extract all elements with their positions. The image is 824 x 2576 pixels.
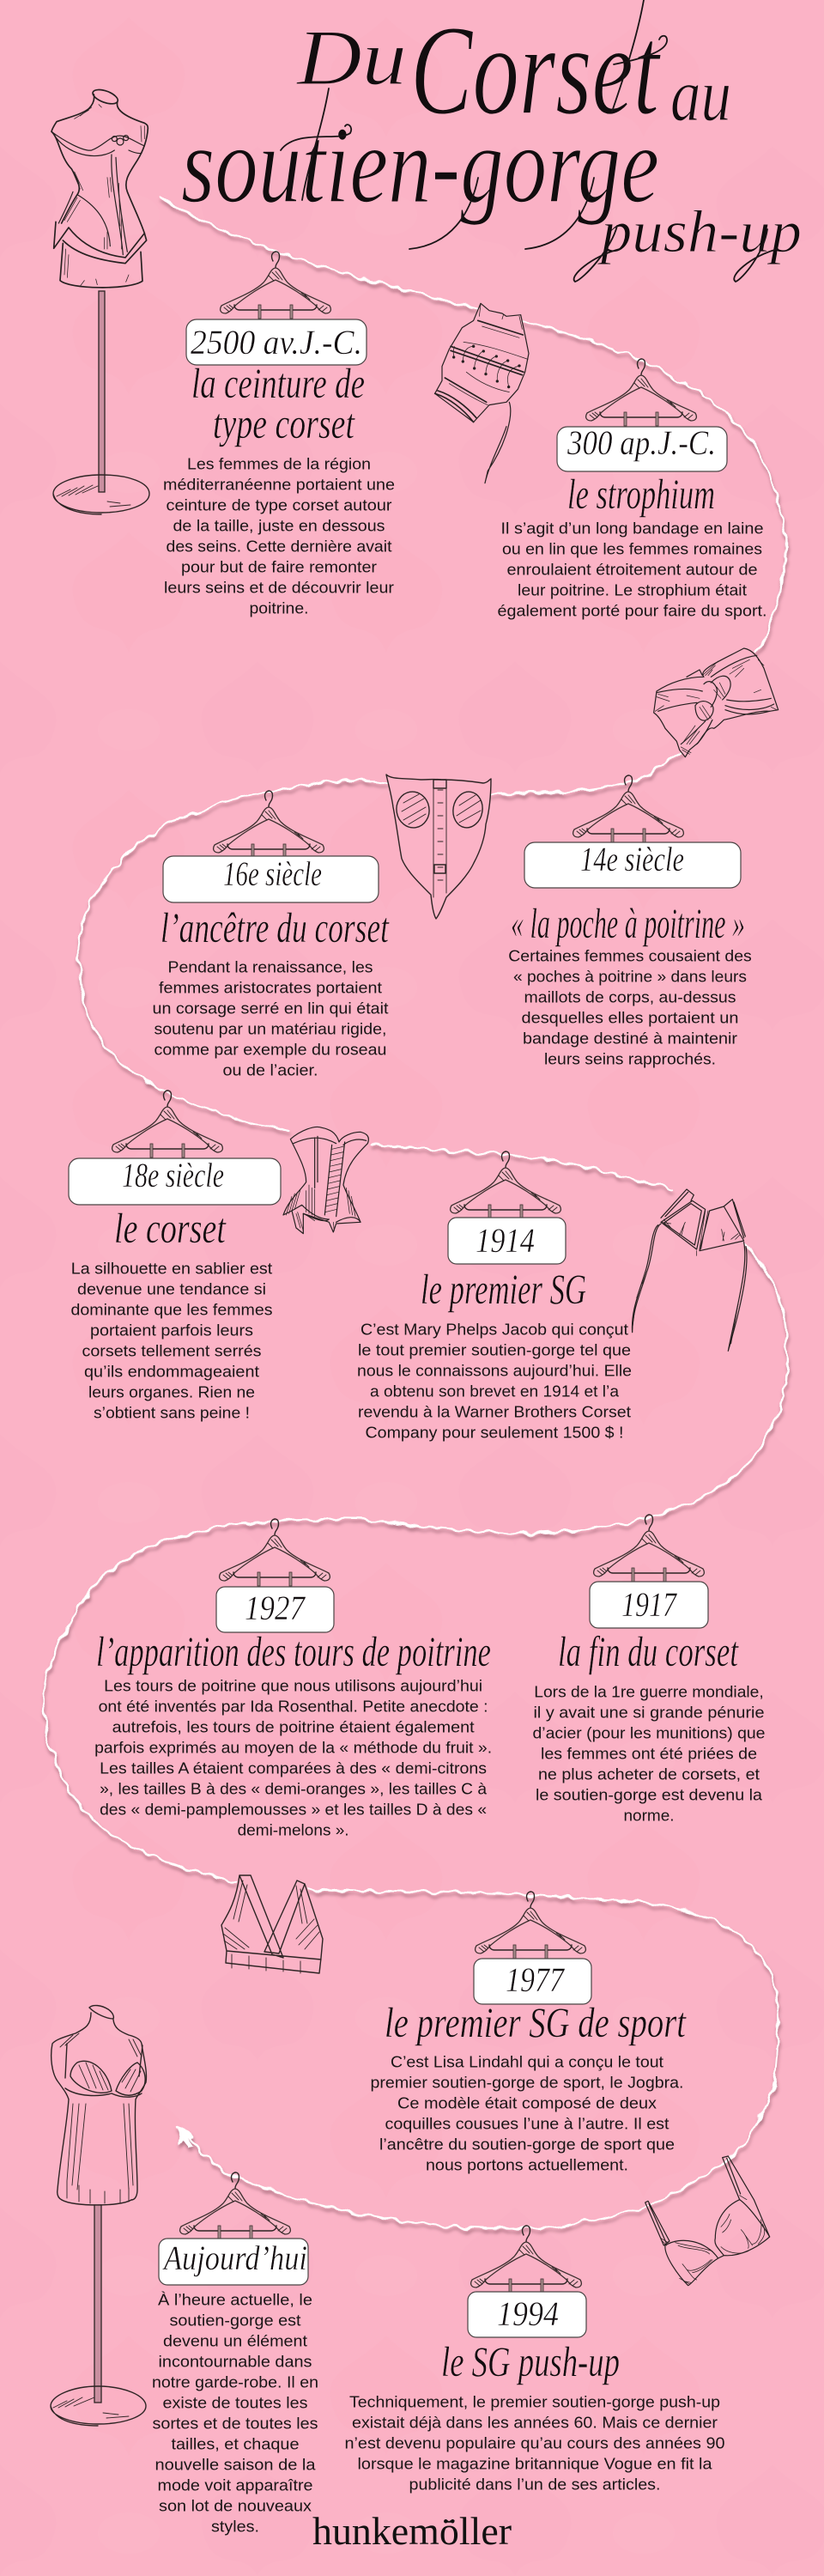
- body text: [508, 946, 752, 1067]
- body text: ont été inventés par Ida Rosenthal. Petite anecdote :: [99, 1697, 488, 1715]
- date plaque: [69, 1156, 281, 1205]
- heading: [191, 359, 365, 447]
- date plaque: 1994: [497, 2294, 559, 2333]
- body text: n’est devenu populaire qu’au cours des années 90: [345, 2433, 724, 2451]
- body text: des « demi-pamplemousses » et les tailles D à des «: [100, 1800, 487, 1818]
- body text: nous le connaissons aujourd’hui. Elle: [357, 1362, 632, 1380]
- date plaque: 300 ap.J.-C.: [566, 423, 716, 462]
- title: Corset: [410, 0, 661, 142]
- body text: leurs seins rapprochés.: [544, 1049, 716, 1067]
- icon: hanger: [573, 775, 683, 842]
- panel: 1917: [532, 1515, 766, 1825]
- icon: first bra 1914: [632, 1189, 747, 1351]
- body text: poitrine.: [249, 599, 309, 617]
- rope: wavy timeline: [44, 197, 788, 2229]
- body text: [153, 958, 388, 1079]
- title: soutien-gorge: [181, 104, 659, 226]
- date plaque: 14e siècle: [580, 840, 684, 878]
- body text: qu’ils endommageaient: [84, 1362, 259, 1380]
- body text: mode voit apparaître: [158, 2476, 312, 2494]
- date plaque: Aujourd’hui: [161, 2239, 307, 2277]
- body text: l’ancêtre du soutien-gorge de sport que: [379, 2135, 675, 2153]
- logo: hunkemöller: hunkemöller: [312, 2509, 512, 2553]
- body text: s’obtient sans peine !: [94, 1403, 250, 1421]
- heading: l’ancêtre du corset: [161, 903, 390, 951]
- title: push-up: [597, 199, 802, 265]
- panel: 18e siècle: [69, 1091, 281, 1421]
- body text: autrefois, les tours de poitrine étaient également: [112, 1717, 475, 1735]
- heading: type corset: [213, 399, 355, 447]
- body text: ceinture de type corset autour: [167, 496, 391, 514]
- body text: corsets tellement serrés: [82, 1341, 261, 1359]
- heading: le corset: [114, 1204, 227, 1252]
- body text: desquelles elles portaient un: [522, 1008, 738, 1026]
- date plaque: [468, 2292, 586, 2337]
- body text: ou de l’acier.: [223, 1061, 318, 1079]
- body text: méditerranéenne portaient une: [163, 476, 395, 494]
- icon: push-up bra: [645, 2156, 770, 2286]
- body text: enroulaient étroitement autour de: [506, 560, 757, 578]
- body text: leur poitrine. Le strophium était: [518, 580, 747, 598]
- date plaque: 18e siècle: [122, 1156, 224, 1194]
- body text: Pendant la renaissance, les: [168, 958, 373, 976]
- body text: styles.: [211, 2518, 259, 2536]
- body text: devenu un élément: [163, 2332, 307, 2350]
- panel: 1927: [94, 1519, 492, 1838]
- date plaque: [590, 1582, 708, 1628]
- icon: antique corset: [386, 775, 491, 919]
- body text: La silhouette en sablier est: [71, 1259, 272, 1277]
- body text: existe de toutes les: [163, 2394, 307, 2412]
- heading: l’apparition des tours de poitrine: [96, 1627, 491, 1675]
- icon: hanger: [476, 1892, 585, 1959]
- body text: comme par exemple du roseau: [154, 1041, 386, 1059]
- body text: incontournable dans: [158, 2353, 312, 2371]
- icon: hanger: [451, 1151, 560, 1218]
- body text: [163, 455, 395, 617]
- body text: [498, 519, 767, 619]
- body text: [345, 2392, 724, 2493]
- body text: un corsage serré en lin qui était: [153, 999, 388, 1018]
- body text: Il s’agit d’un long bandage en laine: [501, 519, 764, 537]
- body text: coquilles cousues l’une à l’autre. Il est: [385, 2114, 670, 2132]
- body text: [371, 2052, 683, 2173]
- icon: sports bra: [221, 1875, 323, 1973]
- body text: soutenu par un matériau rigide,: [154, 1020, 386, 1038]
- body text: Company pour seulement 1500 $ !: [366, 1424, 623, 1442]
- icon: hanger: [471, 2226, 581, 2293]
- body text: À l’heure actuelle, le: [158, 2291, 312, 2309]
- body text: [357, 1321, 632, 1442]
- body text: le tout premier soutien-gorge tel que: [358, 1341, 631, 1359]
- body text: premier soutien-gorge de sport, le Jogbra.: [371, 2073, 683, 2091]
- body text: norme.: [623, 1807, 675, 1825]
- panel: 300 ap. J.-C.: [498, 359, 767, 619]
- body text: Certaines femmes cousaient des: [508, 946, 752, 964]
- date plaque: 2500 av.J.-C.: [191, 323, 362, 361]
- body text: son lot de nouveaux: [159, 2497, 312, 2515]
- body text: leurs seins et de découvrir leur: [164, 579, 394, 597]
- date plaque: [448, 1218, 566, 1264]
- icon: hanger: [112, 1091, 222, 1157]
- body text: des seins. Cette dernière avait: [167, 538, 391, 556]
- body text: ne plus acheter de corsets, et: [538, 1765, 760, 1783]
- panel: 2500 av. J.-C.: [163, 252, 395, 617]
- icon: strophium bow: [654, 648, 779, 757]
- date plaque: [524, 840, 741, 888]
- title: Du: [295, 14, 407, 101]
- body text: pour but de faire remonter: [181, 558, 377, 576]
- heading: la ceinture de: [191, 359, 365, 407]
- panel: Aujourd’hui: [152, 2172, 318, 2536]
- body text: [70, 1259, 273, 1421]
- body text: bandage destiné à maintenir: [523, 1029, 737, 1047]
- body text: revendu à la Warner Brothers Corset: [358, 1403, 631, 1421]
- icon: hanger: [220, 1519, 330, 1586]
- body text: soutien-gorge est: [170, 2312, 300, 2330]
- panel: 16e siècle: [153, 791, 390, 1079]
- body text: parfois exprimés au moyen de la « méthode du fruit ».: [94, 1738, 492, 1756]
- body text: tailles, et chaque: [172, 2435, 299, 2453]
- icon: hanger: [221, 252, 330, 319]
- body text: également porté pour faire du sport.: [498, 601, 767, 619]
- heading: le premier SG: [421, 1265, 586, 1313]
- mannequin with bra: [51, 2006, 146, 2426]
- body text: d’acier (pour les munitions) que: [532, 1724, 766, 1742]
- body text: existait déjà dans les années 60. Mais ce dernier: [352, 2413, 718, 2431]
- date plaque: 1914: [476, 1221, 535, 1260]
- date plaque: 1927: [245, 1589, 306, 1627]
- heading: le SG push-up: [441, 2337, 620, 2385]
- body text: Lors de la 1re guerre mondiale,: [534, 1683, 764, 1701]
- body text: [152, 2291, 318, 2536]
- title: au: [670, 54, 731, 137]
- body text: dominante que les femmes: [70, 1300, 273, 1318]
- body text: Les tailles A étaient comparées à des « demi-citrons: [100, 1759, 487, 1777]
- body text: Techniquement, le premier soutien-gorge push-up: [349, 2392, 720, 2410]
- body text: nouvelle saison de la: [154, 2456, 316, 2474]
- panel: 1994: [345, 2226, 724, 2493]
- body text: lorsque le magazine britannique Vogue en fit la: [357, 2454, 712, 2472]
- body text: les femmes ont été priées de: [541, 1745, 757, 1763]
- body text: de la taille, juste en dessous: [173, 517, 385, 535]
- body text: maillots de corps, au-dessus: [524, 987, 736, 1005]
- body text: ou en lin que les femmes romaines: [502, 539, 762, 557]
- icon: hanger: [214, 791, 324, 858]
- body text: Les tours de poitrine que nous utilisons aujourd’hui: [104, 1676, 482, 1694]
- body text: devenue une tendance si: [77, 1279, 266, 1297]
- body text: a obtenu son brevet en 1914 et l’a: [370, 1382, 620, 1400]
- mannequin with corset: [52, 87, 149, 514]
- body text: sortes et de toutes les: [153, 2415, 318, 2433]
- body text: [94, 1676, 492, 1838]
- body text: Les femmes de la région: [187, 455, 371, 473]
- heading: la fin du corset: [558, 1627, 739, 1675]
- body text: femmes aristocrates portaient: [159, 979, 382, 997]
- body text: « poches à poitrine » dans leurs: [513, 967, 747, 985]
- icon: hanger: [594, 1515, 704, 1582]
- heading: le premier SG de sport: [385, 1998, 687, 2046]
- body text: notre garde-robe. Il en: [152, 2373, 318, 2391]
- body text: C’est Mary Phelps Jacob qui conçut: [360, 1321, 628, 1339]
- icon: hanger: [180, 2172, 290, 2239]
- body text: portaient parfois leurs: [90, 1321, 253, 1339]
- date plaque: 16e siècle: [223, 854, 322, 893]
- body text: publicité dans l’un de ses articles.: [409, 2475, 661, 2493]
- body text: nous portons actuellement.: [426, 2155, 628, 2173]
- icon: 18th century corset: [283, 1127, 368, 1234]
- body text: C’est Lisa Lindahl qui a conçu le tout: [391, 2052, 663, 2070]
- panel: 1914: [357, 1151, 632, 1442]
- body text: », les tailles B à des « demi-oranges », les tailles C à: [100, 1779, 488, 1797]
- title: [181, 0, 802, 282]
- heading: le strophium: [567, 470, 715, 518]
- body text: le soutien-gorge est devenu la: [536, 1786, 763, 1804]
- panel: 1977: [371, 1892, 687, 2173]
- date plaque: 1917: [621, 1585, 678, 1624]
- body text: il y avait une si grande pénurie: [534, 1704, 764, 1722]
- date plaque: 1977: [506, 1960, 566, 1999]
- icon: corset belt: [435, 303, 529, 483]
- date plaque: [163, 854, 379, 902]
- body text: leurs organes. Rien ne: [88, 1382, 255, 1400]
- panel: 14e siècle: [508, 775, 752, 1067]
- body text: demi-melons ».: [238, 1820, 349, 1838]
- body text: [532, 1683, 766, 1825]
- icon: hanger: [586, 359, 696, 426]
- body text: Ce modèle était composé de deux: [397, 2093, 657, 2111]
- date plaque: [474, 1959, 591, 2004]
- date plaque: [216, 1587, 334, 1632]
